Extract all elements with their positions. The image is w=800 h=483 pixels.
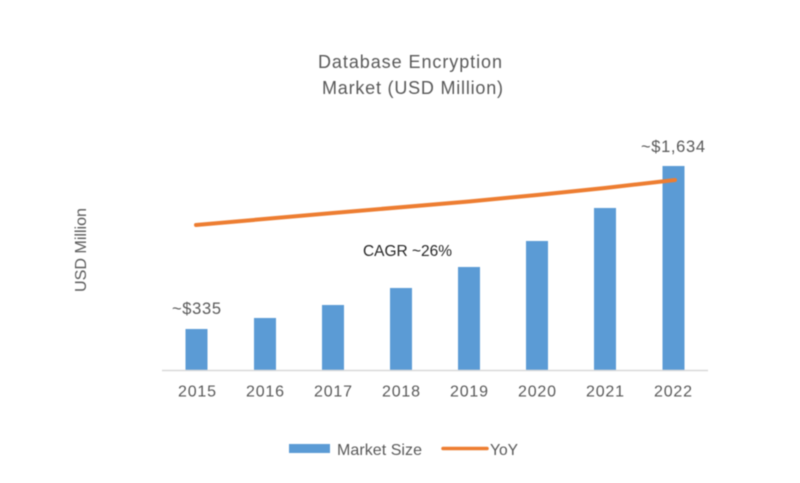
legend	[289, 442, 518, 459]
x axis line	[162, 370, 708, 372]
legend: market size: Market Size	[337, 442, 422, 459]
x-axis year labels: 2020	[518, 384, 556, 400]
annotation: 2022 value: ~$1,634	[641, 138, 705, 156]
line: YoY	[196, 180, 675, 225]
x-axis year labels: 2019	[450, 384, 488, 400]
title	[318, 52, 503, 98]
bars: market size	[186, 166, 684, 370]
annotation: CAGR: CAGR ~26%	[363, 243, 452, 260]
x-axis year labels: 2016	[246, 384, 284, 400]
legend: YoY: YoY	[490, 442, 518, 459]
x-axis year labels	[178, 384, 692, 400]
title: Database Encryption	[318, 52, 502, 72]
x-axis year labels: 2021	[586, 384, 624, 400]
annotation: 2015 value: ~$335	[172, 300, 221, 318]
x-axis year labels: 2017	[314, 384, 352, 400]
y-axis label: USD Million	[73, 208, 90, 292]
x-axis year labels: 2015	[178, 384, 216, 400]
legend: market size	[289, 442, 422, 459]
title: Market (USD Million)	[322, 78, 503, 98]
x-axis year labels: 2018	[382, 384, 420, 400]
x-axis year labels: 2022	[654, 384, 692, 400]
legend: YoY	[443, 442, 518, 459]
